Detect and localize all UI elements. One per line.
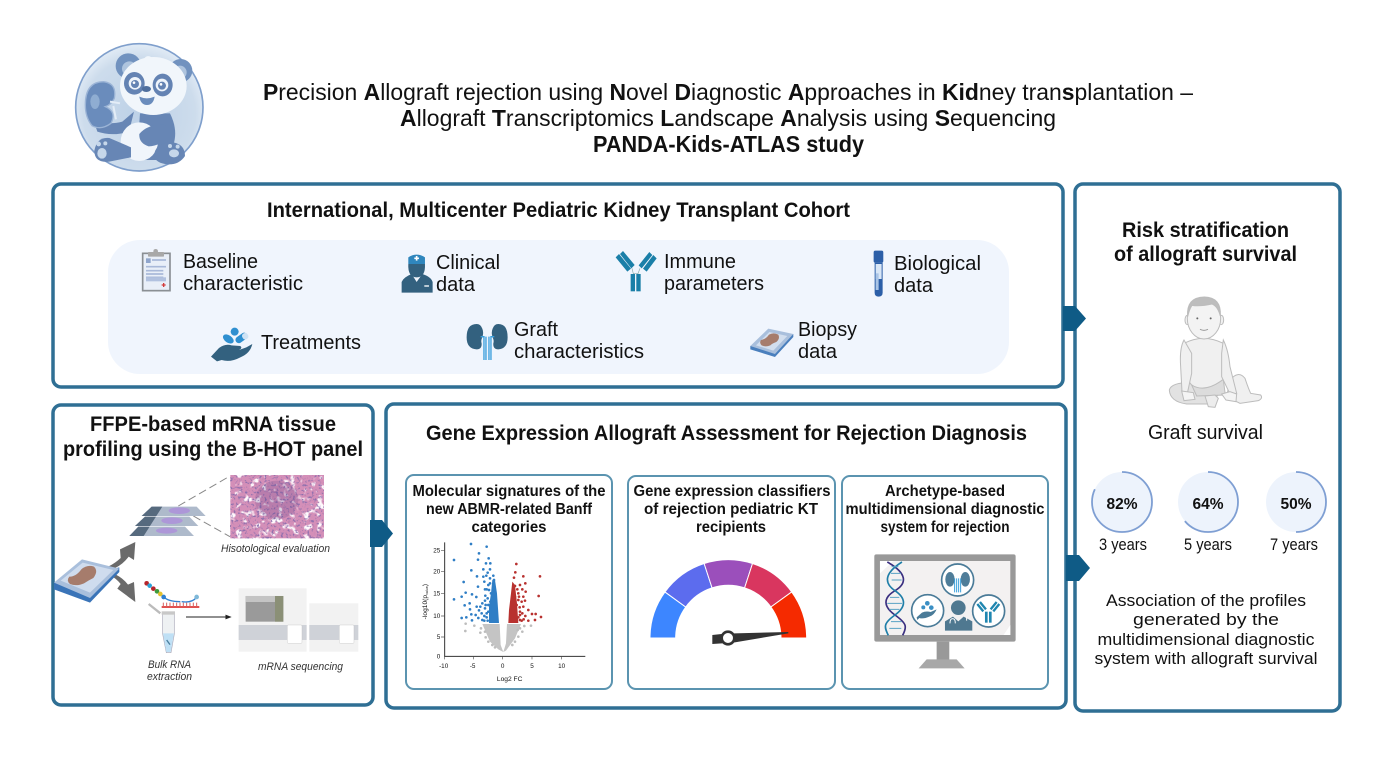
biological data label: Biological	[894, 253, 981, 275]
5-year survival ring	[1178, 472, 1238, 554]
volcano plot: -10	[439, 663, 449, 670]
classifiers heading: of rejection pediatric KT	[644, 501, 819, 518]
branching arrows	[97, 542, 135, 602]
risk stratification heading: of allograft survival	[1114, 243, 1297, 266]
volcano plot: 0	[501, 663, 505, 670]
baseline characteristic label	[183, 251, 303, 295]
baseline characteristic label: characteristic	[183, 273, 303, 295]
icon: sequencers	[239, 588, 358, 652]
icon: hand with pills	[211, 328, 252, 361]
risk stratification heading: Risk stratification	[1122, 219, 1289, 242]
icon: baby	[1169, 297, 1262, 407]
association text: generated by the	[1133, 611, 1279, 629]
tissue profiling heading: FFPE-based mRNA tissue	[90, 412, 336, 436]
5-year survival ring: 5 years	[1184, 536, 1232, 554]
treatments label: Treatments	[261, 332, 361, 354]
3-year survival ring: 82%	[1106, 496, 1138, 513]
gauge needle	[712, 632, 788, 644]
volcano plot: 0	[437, 653, 441, 660]
molecular signatures heading: Molecular signatures of the	[412, 483, 606, 500]
panel: cohort	[53, 184, 1063, 387]
icon: DNA helix	[885, 562, 905, 635]
panel: archetype system	[842, 476, 1048, 689]
clinical data label: Clinical	[436, 252, 500, 274]
bulk RNA extraction label	[147, 659, 192, 683]
molecular signatures heading: categories	[472, 519, 546, 536]
volcano plot	[422, 542, 585, 683]
panel: risk stratification	[1075, 184, 1340, 711]
association text: multidimensional diagnostic	[1098, 631, 1314, 649]
icon: treatment circle	[912, 595, 944, 627]
baseline characteristic label: Baseline	[183, 251, 258, 273]
volcano plot: )	[422, 584, 429, 586]
mRNA sequencing label: mRNA sequencing	[258, 661, 344, 673]
association text: system with allograft survival	[1094, 650, 1318, 668]
icon: biopsy cassette	[54, 559, 119, 603]
clinical data label	[436, 252, 500, 296]
tissue profiling heading	[63, 412, 363, 461]
3-year survival ring: 3 years	[1099, 536, 1147, 554]
bulk RNA extraction label: Bulk RNA	[148, 659, 191, 671]
volcano plot: -5	[470, 663, 476, 670]
biological data label: data	[894, 275, 934, 297]
biopsy data label	[798, 319, 857, 363]
volcano plot: 10	[558, 663, 566, 670]
tissue profiling heading: profiling using the B-HOT panel	[63, 437, 363, 461]
title	[263, 79, 1193, 157]
archetype heading	[846, 483, 1045, 536]
icon: biopsy cassette	[750, 329, 793, 357]
immune parameters label: Immune	[664, 251, 736, 273]
biopsy data label: data	[798, 341, 838, 363]
icon: sample tube	[149, 604, 175, 653]
7-year survival ring: 7 years	[1270, 536, 1318, 554]
arrow: cohort to risk	[1063, 306, 1086, 331]
icon: blood tube	[874, 251, 883, 297]
molecular signatures heading: new ABMR-related Banff	[426, 501, 593, 518]
3-year survival ring	[1092, 472, 1152, 554]
data categories background	[108, 240, 1009, 374]
icon: clipboard	[143, 249, 170, 291]
icon: clinician	[945, 600, 972, 631]
biopsy data label: Biopsy	[798, 319, 857, 341]
biological data label	[894, 253, 981, 297]
molecular signatures heading	[412, 483, 606, 536]
volcano plot: -log10(p	[422, 595, 429, 619]
volcano plot: 20	[433, 568, 441, 575]
icon: histology micrograph	[230, 475, 324, 538]
panda logo	[76, 44, 203, 171]
volcano plot: 5	[437, 634, 441, 641]
icon: kidneys	[467, 324, 508, 360]
immune parameters label	[664, 251, 764, 295]
volcano plot: value	[425, 586, 429, 595]
volcano plot: Log2 FC	[497, 676, 523, 683]
immune parameters label: parameters	[664, 273, 764, 295]
arrow	[186, 615, 230, 619]
graft characteristics label: characteristics	[514, 341, 644, 363]
icon: antibody	[616, 251, 657, 291]
icon: monitor	[874, 554, 1016, 668]
graft characteristics label	[514, 319, 644, 363]
volcano plot: 10	[433, 613, 441, 620]
icon: kidney circle	[942, 564, 974, 596]
7-year survival ring: 50%	[1280, 496, 1312, 513]
classifiers heading	[634, 483, 830, 536]
5-year survival ring: 64%	[1192, 496, 1224, 513]
archetype heading: Archetype-based	[885, 483, 1005, 500]
association text: Association of the profiles	[1106, 592, 1306, 610]
title: Allograft Transcriptomics Landscape Analysis using Sequencing	[400, 105, 1056, 131]
gauge	[650, 560, 807, 644]
volcano plot: 5	[530, 663, 534, 670]
association text	[1094, 592, 1318, 668]
arrow: assessment to risk	[1066, 555, 1090, 581]
volcano plot: 15	[433, 591, 441, 598]
graft survival label: Graft survival	[1148, 422, 1263, 444]
gene expression heading: Gene Expression Allograft Assessment for Rejection Diagnosis	[426, 422, 1027, 445]
icon: clinician	[402, 255, 433, 293]
risk stratification heading	[1114, 219, 1297, 266]
icon: antibody circle	[973, 595, 1005, 627]
arrow: tissue to assessment	[370, 520, 393, 547]
workflow illustration	[54, 475, 358, 653]
clinical data label: data	[436, 274, 476, 296]
title: Precision Allograft rejection using Novel Diagnostic Approaches in Kidney transplantation –	[263, 79, 1193, 105]
title: PANDA-Kids-ATLAS study	[593, 131, 864, 157]
icon: glass slides	[129, 507, 206, 536]
classifiers heading: recipients	[696, 519, 766, 536]
archetype heading: multidimensional diagnostic	[846, 501, 1045, 518]
bulk RNA extraction label: extraction	[147, 671, 192, 683]
classifiers heading: Gene expression classifiers	[634, 483, 830, 500]
panel: tissue profiling	[53, 405, 373, 705]
cohort heading: International, Multicenter Pediatric Kidney Transplant Cohort	[267, 199, 850, 222]
icon: RNA probe	[144, 581, 199, 607]
histological evaluation label: Hisotological evaluation	[221, 543, 330, 555]
panel: gene expression classifiers	[628, 476, 835, 689]
panel: molecular signatures	[406, 475, 612, 689]
panel: gene expression assessment	[386, 404, 1066, 708]
volcano plot: 25	[433, 548, 441, 555]
graft characteristics label: Graft	[514, 319, 558, 341]
archetype heading: system for rejection	[880, 519, 1010, 536]
7-year survival ring	[1266, 472, 1326, 554]
